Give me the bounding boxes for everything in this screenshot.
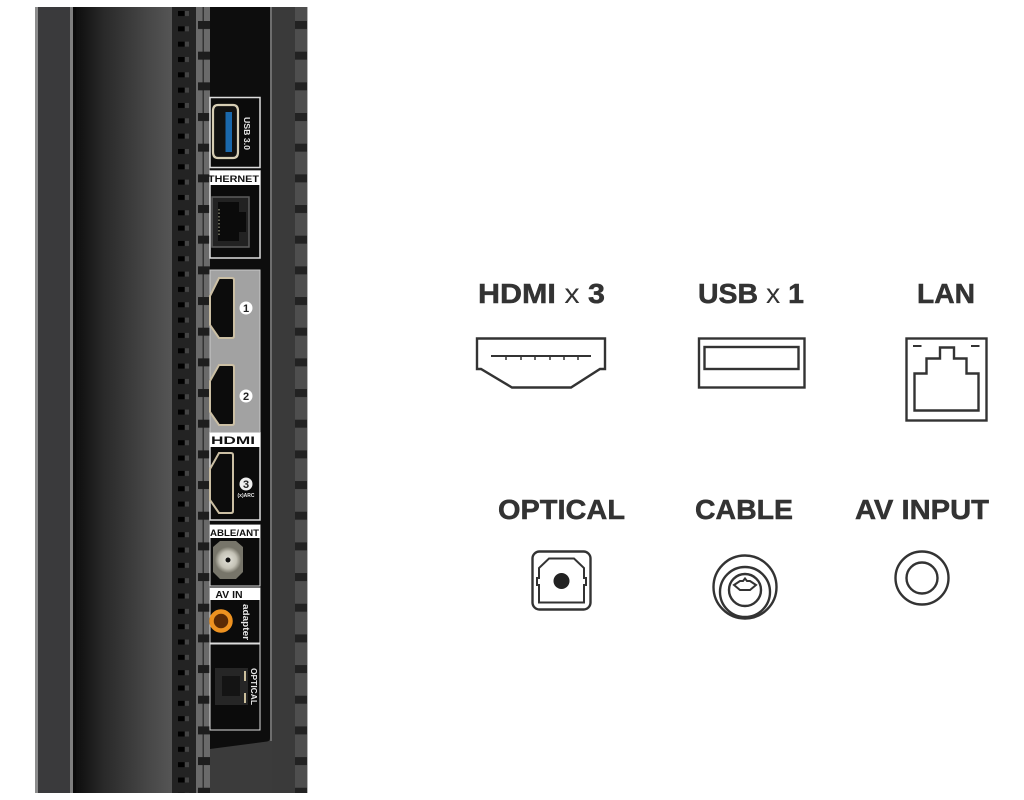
heading: LAN: LAN	[917, 278, 975, 309]
label: CABLE/ANT: ABLE/ANT	[210, 528, 259, 539]
panel: Ethernet port	[208, 171, 260, 258]
number 1	[240, 302, 252, 315]
icon: cable	[714, 556, 776, 618]
icon: orange RCA jack	[212, 612, 230, 630]
number 2	[240, 390, 252, 403]
panel: Cable/Ant port	[210, 525, 260, 586]
number 2: 2	[243, 391, 249, 403]
number 3: 3	[243, 479, 249, 491]
icon: LAN	[906, 338, 986, 420]
panel: HDMI 1 and 2	[210, 270, 260, 433]
panel: HDMI 3	[210, 433, 260, 520]
heading: OPTICAL: OPTICAL	[498, 494, 625, 525]
heading: USB x 1: USB x 1	[698, 278, 804, 309]
icon: HDMI port 3	[210, 453, 233, 513]
number 1: 1	[243, 303, 249, 315]
panel: USB 3.0 port	[210, 98, 260, 168]
icon: USB connector	[213, 105, 238, 158]
label: ETHERNET: THERNET	[208, 174, 259, 185]
label: adapter: adapter	[241, 604, 251, 641]
icon: USB	[699, 338, 804, 388]
label: HDMI: HDMI	[211, 435, 255, 447]
panel: AV in port	[210, 588, 260, 643]
icon: optical	[532, 552, 590, 610]
heading: AV INPUT: AV INPUT	[855, 494, 989, 525]
icon: AV input	[896, 552, 948, 604]
label: OPTICAL: OPTICAL	[249, 668, 259, 705]
panel: Optical port	[210, 644, 260, 730]
heading: CABLE: CABLE	[695, 494, 793, 525]
icon: HDMI port 2	[210, 365, 234, 425]
icon: optical jack	[215, 668, 248, 705]
heading: HDMI x 3: HDMI x 3	[478, 278, 605, 309]
icon: HDMI port 1	[210, 278, 234, 338]
panel: TV rear edge photo	[35, 7, 308, 793]
label: ARC: (x)ARC	[238, 493, 255, 499]
label: USB 3.0: USB 3.0	[242, 117, 251, 151]
icon: HDMI	[477, 338, 605, 388]
icon: coax connector	[213, 541, 243, 579]
label: AV IN: AV IN	[215, 589, 243, 601]
icon: RJ45 jack	[212, 197, 249, 247]
